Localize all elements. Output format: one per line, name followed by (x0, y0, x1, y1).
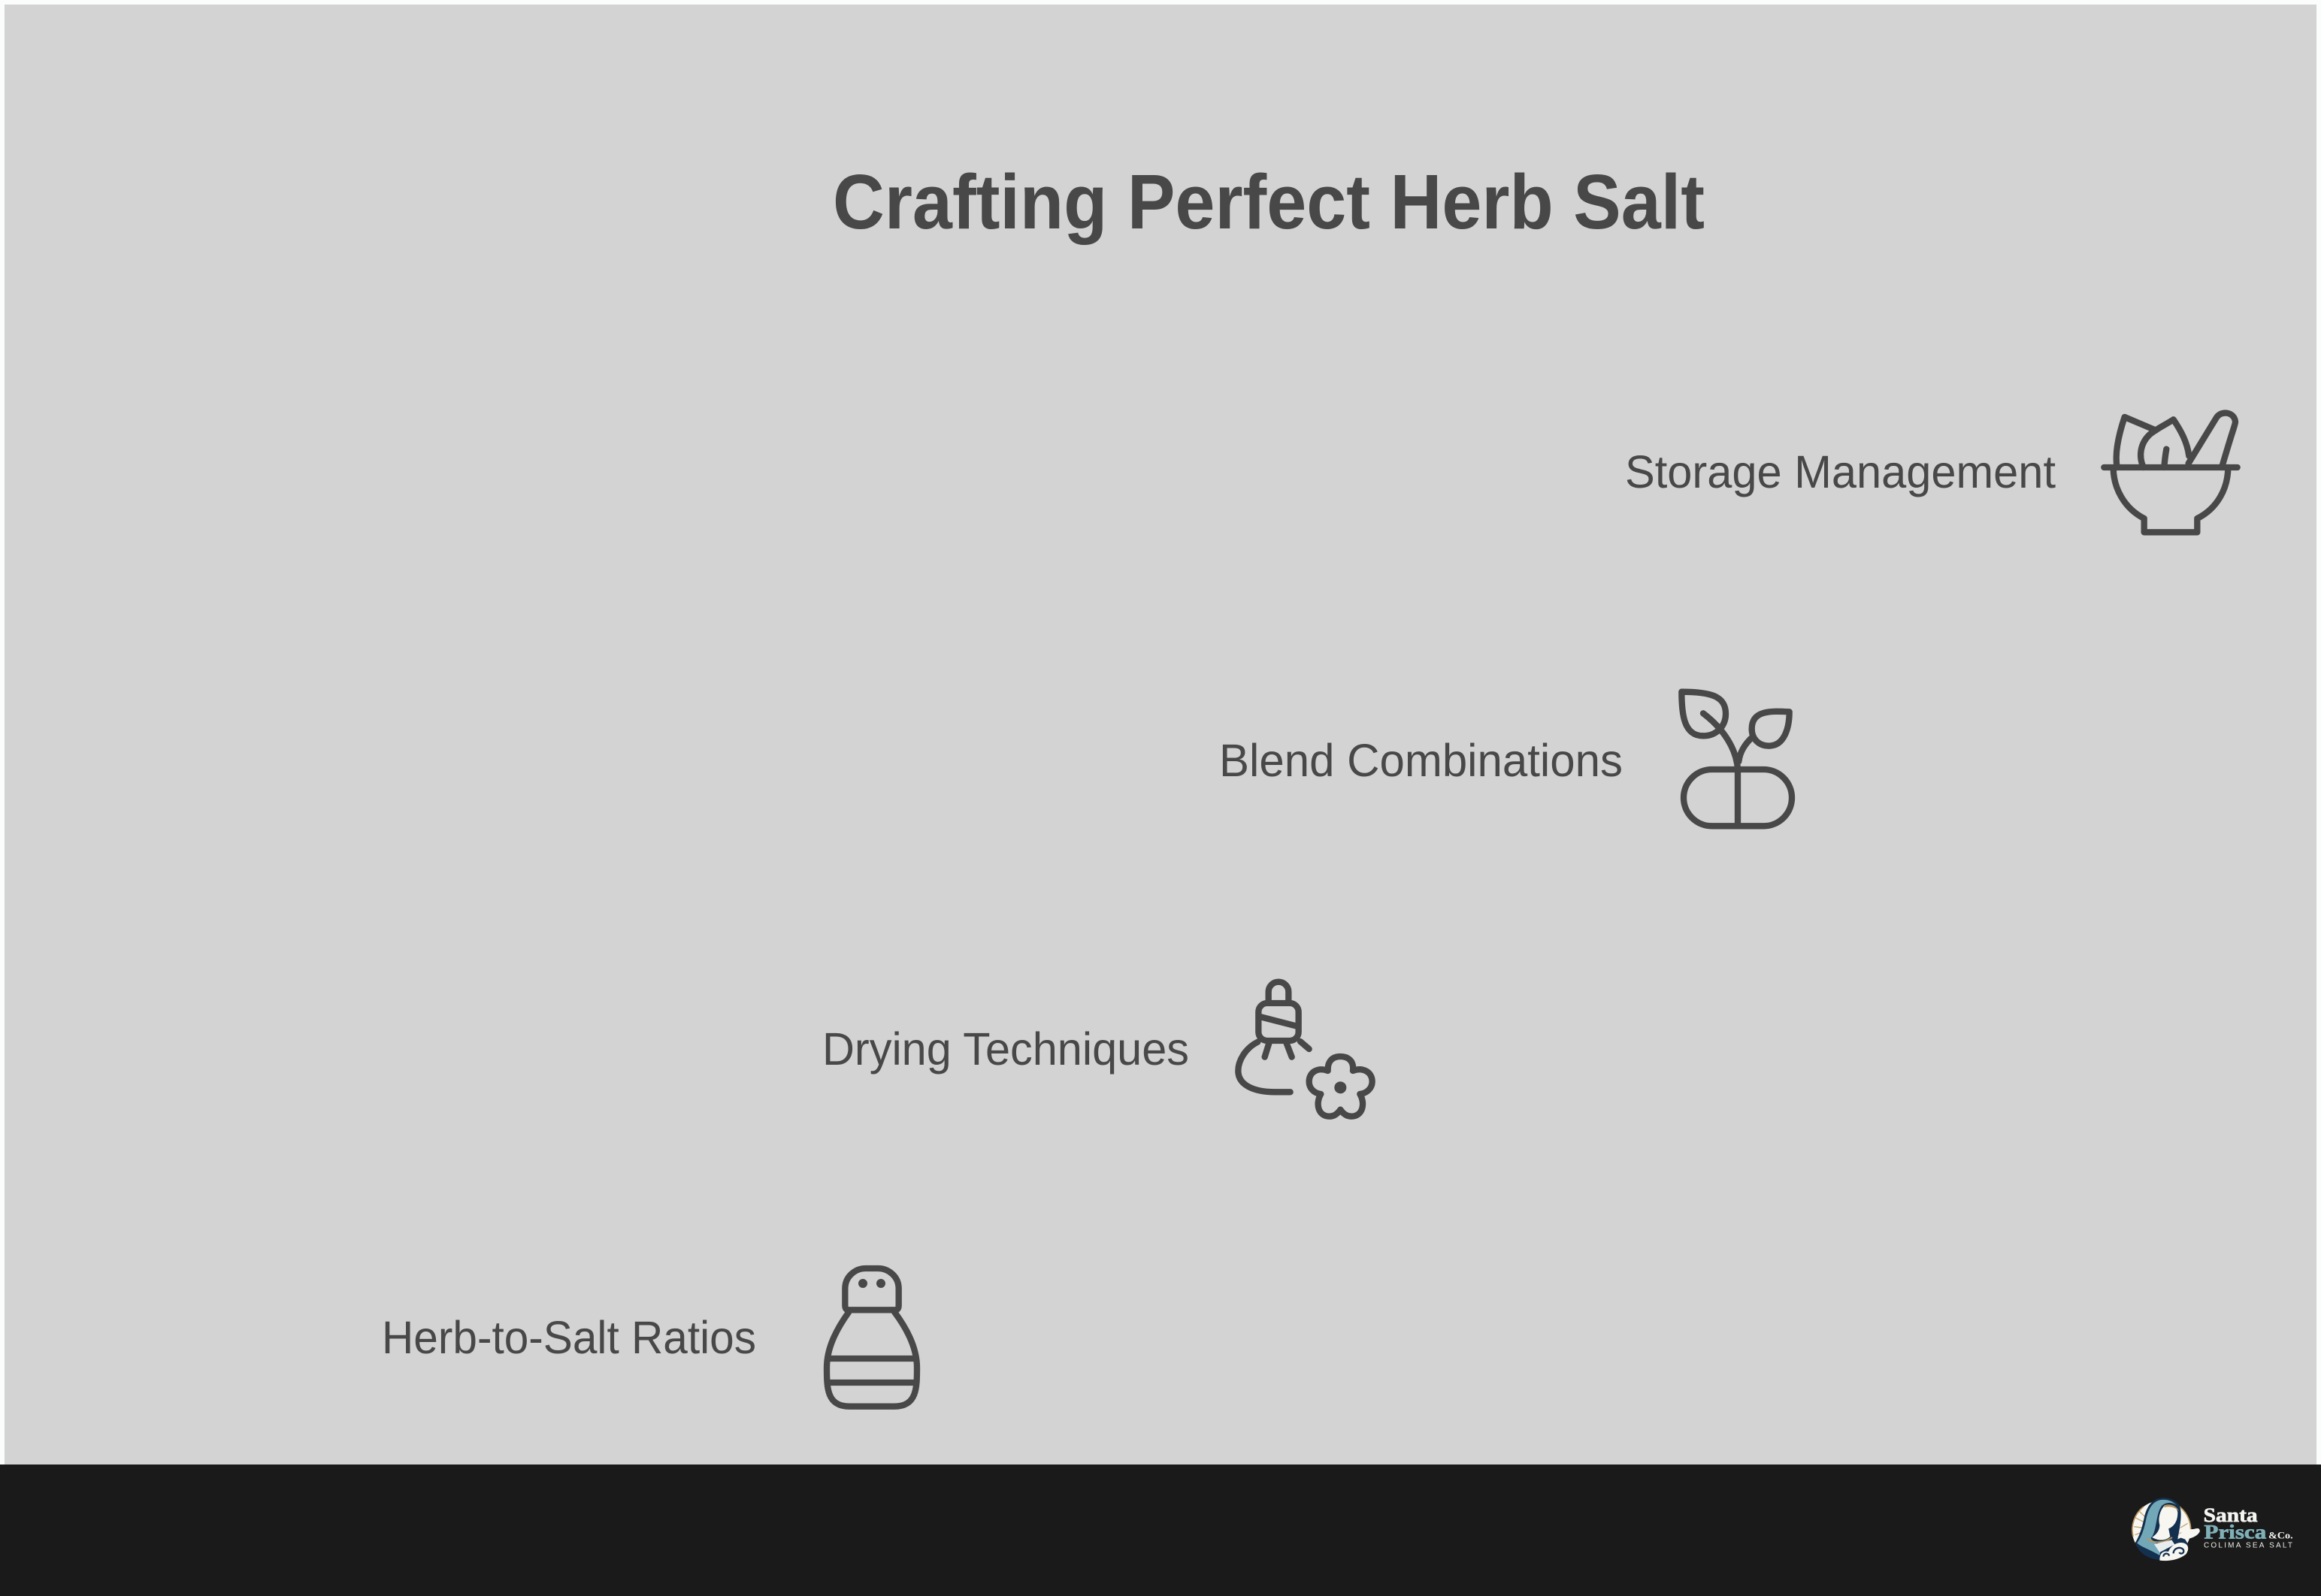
icon: hanging herb bundle and flower (1238, 982, 1372, 1117)
logo wordmark (2204, 1504, 2293, 1549)
step 2: Drying Techniques label: Drying Techniques (822, 1023, 1189, 1075)
step 3: Blend Combinations label: Blend Combinations (1219, 735, 1623, 786)
footer bar (0, 1465, 2321, 1596)
logo wordmark: COLIMA SEA SALT (2204, 1541, 2292, 1549)
icon: sprout and capsule (1681, 692, 1792, 826)
step 4: Storage Management label: Storage Management (1625, 446, 2056, 497)
step 1: Herb-to-Salt Ratios label: Herb-to-Salt Ratios (382, 1312, 756, 1363)
logo emblem (2132, 1498, 2200, 1561)
icon: salt shaker (827, 1268, 917, 1407)
logo wordmark: &Co. (2268, 1530, 2293, 1540)
logo wordmark: Prisca (2204, 1520, 2266, 1543)
icon: mortar and pestle with herbs (2104, 413, 2238, 532)
logo wordmark: Santa (2204, 1504, 2258, 1526)
logo: Santa Prisca and Co. (2132, 1498, 2293, 1561)
title: Crafting Perfect Herb Salt (833, 159, 1705, 245)
